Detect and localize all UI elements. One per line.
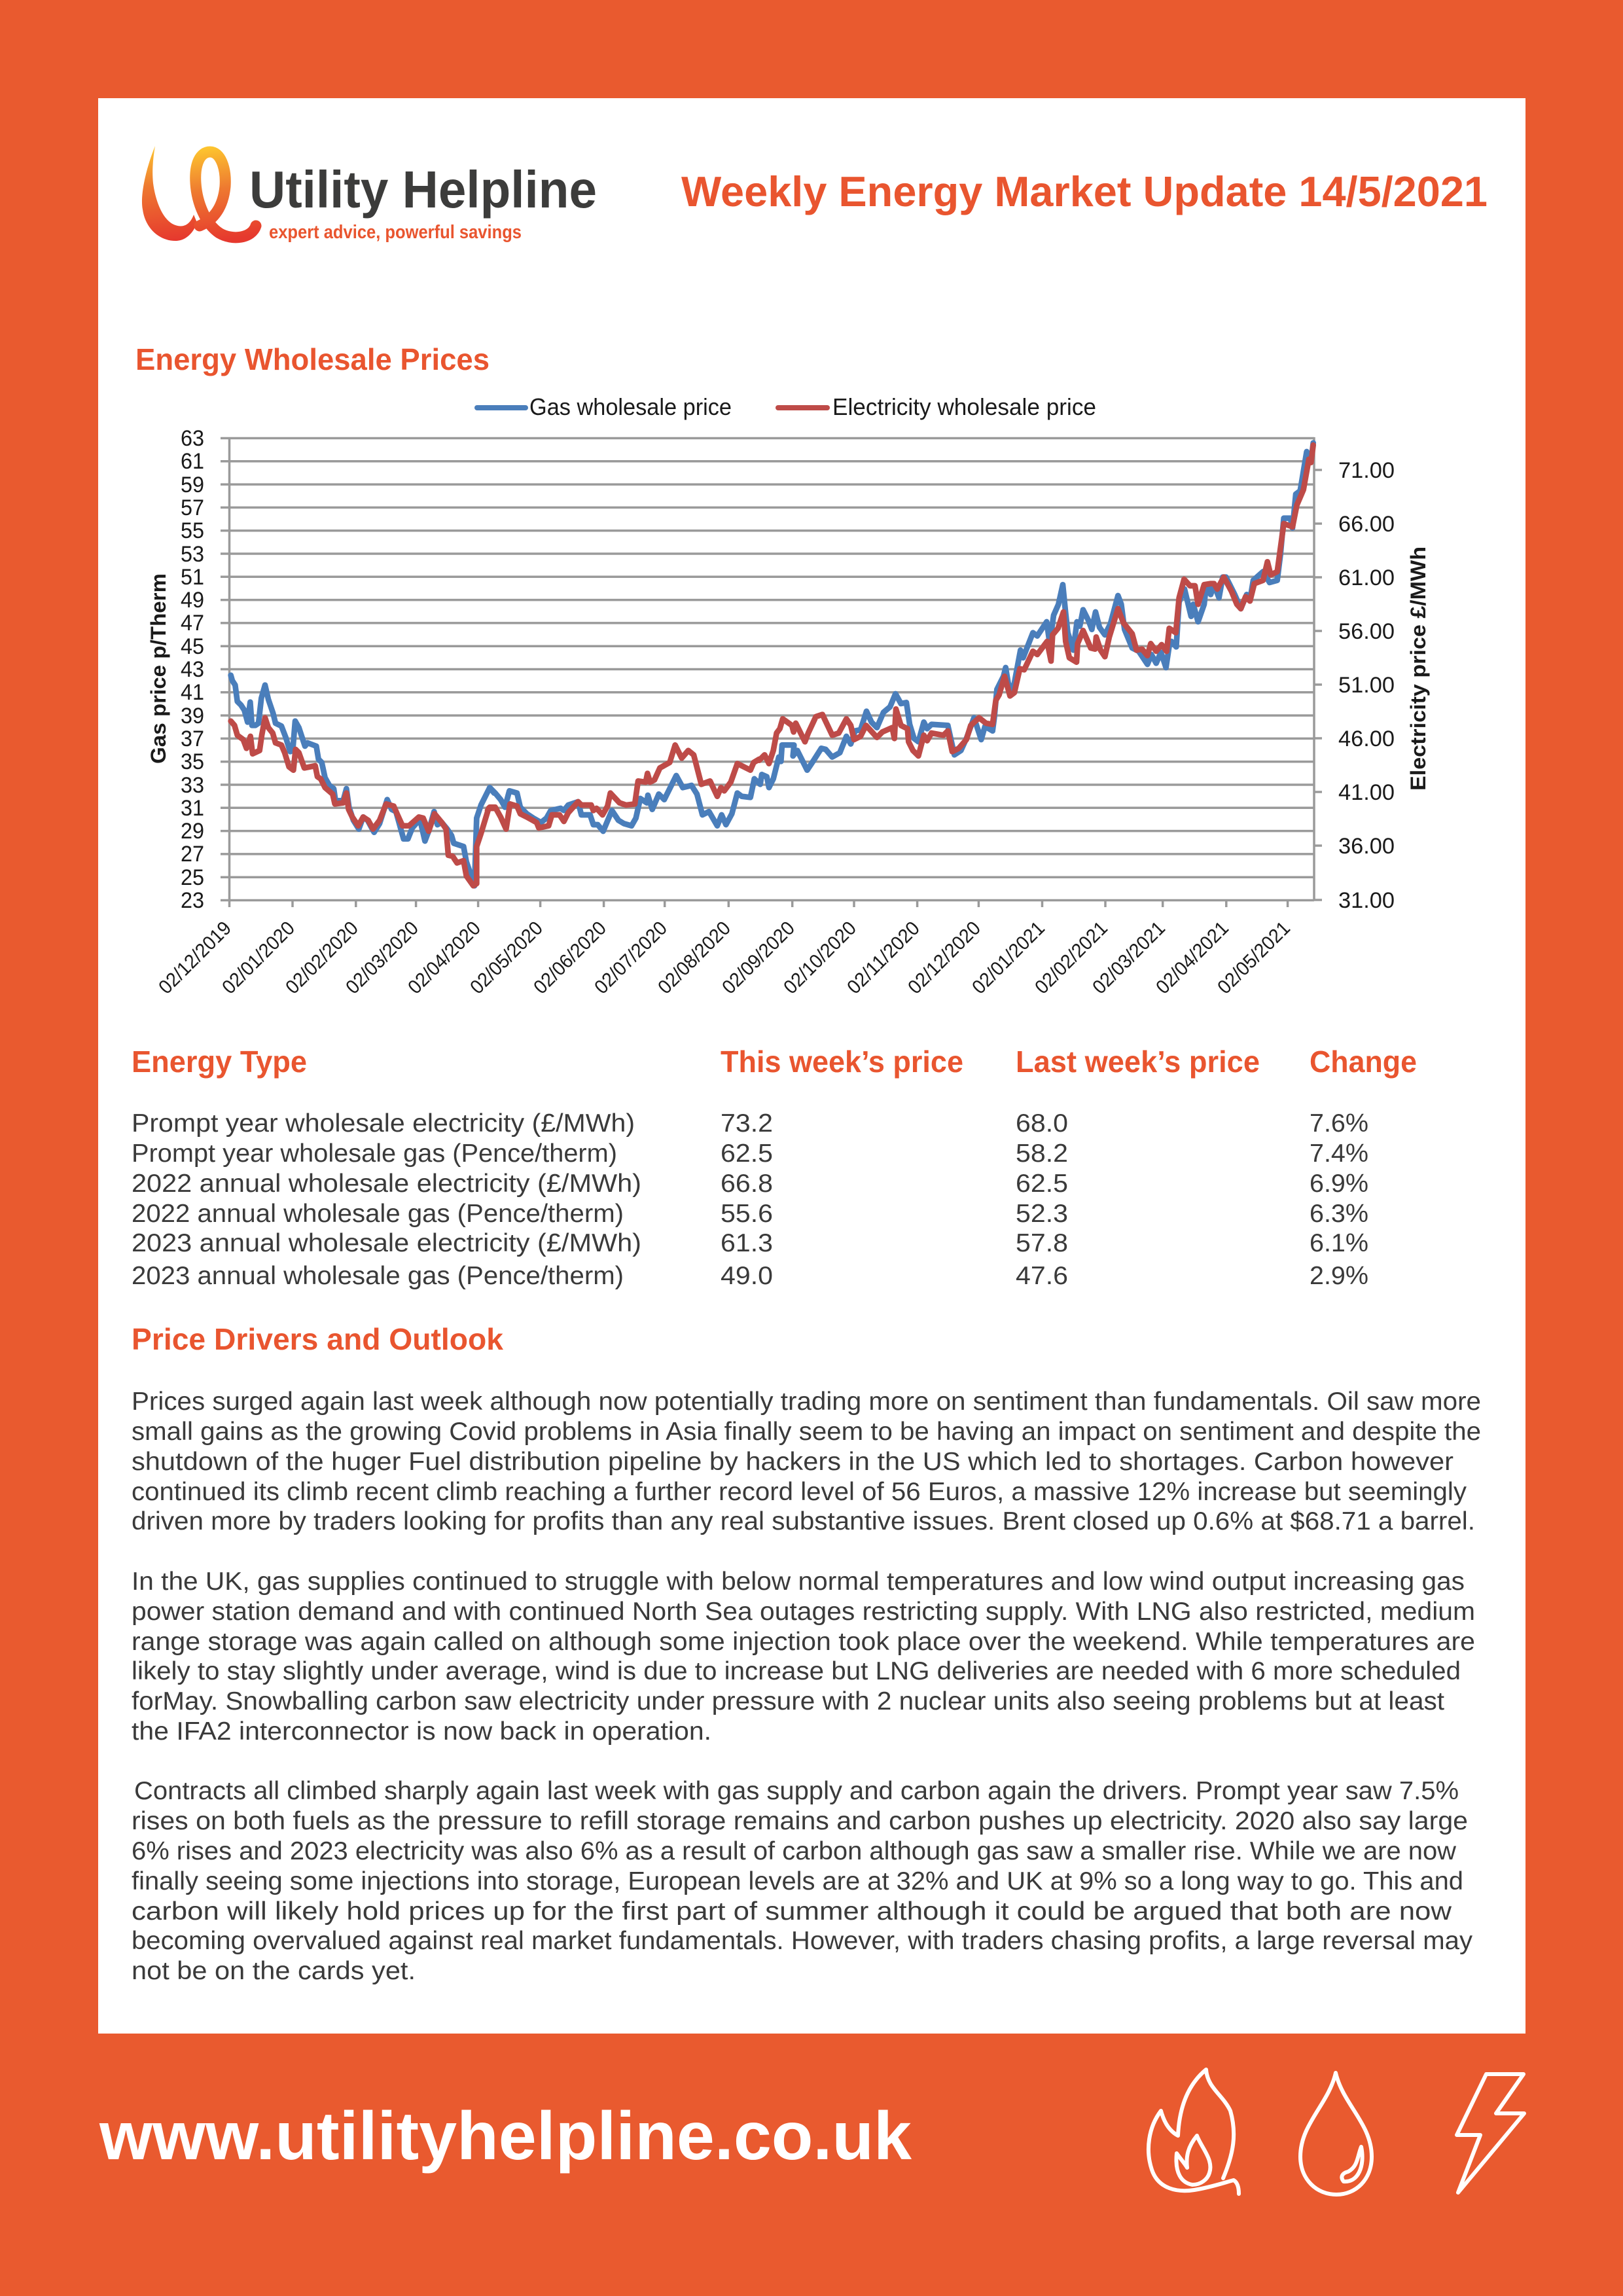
table row: 2023 gas: 2.9% xyxy=(1310,1262,1368,1290)
chart legend: Gas wholesale price xyxy=(529,393,732,420)
left axis labels: 43 xyxy=(181,657,204,682)
left axis labels: 27 xyxy=(181,842,204,867)
x axis date labels: 02/02/2021 xyxy=(1031,918,1112,998)
series: gas wholesale price xyxy=(231,443,1313,886)
table header row xyxy=(132,1045,1417,1079)
text block: paragraph 3: Contracts all climbed sharply again last week with gas supply and carbon again the drivers. Prompt year saw 7.5% xyxy=(134,1777,1459,1805)
table row: 2022 electricity: 62.5 xyxy=(1016,1170,1068,1198)
right axis labels: 71.00 xyxy=(1338,458,1395,483)
table row: 2022 electricity xyxy=(132,1170,1368,1198)
text block: paragraph 3: finally seeing some injections into storage, European levels are at 32% and UK at 9% so a long way to go. This and xyxy=(132,1867,1463,1895)
text block: paragraph 2: In the UK, gas supplies continued to struggle with below normal temperatures and low wind output increasing gas xyxy=(132,1568,1465,1596)
left axis labels: 31 xyxy=(181,796,204,821)
x axis date labels: 02/10/2020 xyxy=(779,918,861,998)
table header row: Change xyxy=(1310,1045,1417,1079)
left axis labels: 49 xyxy=(181,588,204,613)
left axis labels xyxy=(181,426,204,913)
x axis date labels: 02/06/2020 xyxy=(529,918,611,998)
right axis labels: 56.00 xyxy=(1338,619,1395,644)
text block: paragraph 2 xyxy=(132,1568,1475,1746)
right axis labels: 66.00 xyxy=(1338,512,1395,537)
table row: 2023 electricity: 2023 annual wholesale electricity (£/MWh) xyxy=(132,1229,641,1257)
right axis labels: 31.00 xyxy=(1338,888,1395,913)
text block: paragraph 1: Prices surged again last week although now potentially trading more on sentiment than fundamentals. Oil saw more xyxy=(132,1388,1481,1416)
text block: paragraph 2: forMay. Snowballing carbon saw electricity under pressure with 2 nuclear units also seeing problems but at least xyxy=(132,1687,1444,1715)
table row: 2022 gas: 55.6 xyxy=(721,1200,773,1228)
text block: paragraph 3: 6% rises and 2023 electricity was also 6% as a result of carbon although gas saw a smaller rise. While we are now xyxy=(132,1837,1457,1865)
table row: prompt year gas: 62.5 xyxy=(721,1139,773,1168)
left axis labels: 39 xyxy=(181,704,204,728)
table row: 2022 gas: 6.3% xyxy=(1310,1200,1368,1228)
text block: paragraph 3 xyxy=(132,1777,1473,1985)
table row: prompt year gas: Prompt year wholesale gas (Pence/therm) xyxy=(132,1139,617,1168)
table row: prompt year electricity: 7.6% xyxy=(1310,1109,1368,1138)
left axis labels: 57 xyxy=(181,495,204,520)
table row: 2022 electricity: 6.9% xyxy=(1310,1170,1368,1198)
panel: white content area xyxy=(98,98,1525,2034)
x axis date labels: 02/12/2019 xyxy=(154,918,236,998)
text block: paragraph 2: likely to stay slightly under average, wind is due to increase but LNG deliveries are needed with 6 more scheduled xyxy=(132,1657,1461,1685)
title: Weekly Energy Market Update 14/5/2021 xyxy=(681,168,1488,215)
text block: paragraph 3: carbon will likely hold prices up for the first part of summer although it could be argued that both are now xyxy=(132,1897,1452,1926)
chart legend: Electricity wholesale price xyxy=(832,393,1096,420)
x axis date labels: 02/12/2020 xyxy=(904,918,985,998)
right axis labels: 61.00 xyxy=(1338,565,1395,590)
x axis date labels: 02/05/2021 xyxy=(1213,918,1294,998)
heading: energy wholesale prices: Energy Wholesale Prices xyxy=(135,342,490,376)
table row: 2022 electricity: 66.8 xyxy=(721,1170,773,1198)
left axis title: Gas price p/Therm xyxy=(147,573,170,764)
x axis date labels: 02/03/2021 xyxy=(1088,918,1169,998)
right axis labels: 46.00 xyxy=(1338,726,1395,751)
x axis date labels: 02/05/2020 xyxy=(466,918,547,998)
x axis date labels xyxy=(154,918,1294,998)
logo tagline: expert advice, powerful savings xyxy=(269,222,522,243)
right axis labels xyxy=(1338,458,1395,913)
icon: water drop xyxy=(1300,2073,1372,2195)
table row: prompt year electricity: Prompt year wholesale electricity (£/MWh) xyxy=(132,1109,635,1138)
table row: prompt year gas xyxy=(132,1139,1368,1168)
left axis labels: 45 xyxy=(181,634,204,659)
table row: 2023 electricity: 61.3 xyxy=(721,1229,773,1257)
series: electricity wholesale price xyxy=(231,445,1313,886)
right axis labels: 41.00 xyxy=(1338,780,1395,805)
table row: 2022 gas: 2022 annual wholesale gas (Pence/therm) xyxy=(132,1200,624,1228)
left axis labels: 51 xyxy=(181,565,204,590)
table row: 2023 gas: 49.0 xyxy=(721,1262,773,1290)
table: energy prices xyxy=(132,1045,1417,1290)
left axis labels: 33 xyxy=(181,773,204,798)
text block: paragraph 3: not be on the cards yet. xyxy=(132,1957,416,1985)
left axis labels: 55 xyxy=(181,518,204,543)
table row: 2022 gas: 52.3 xyxy=(1016,1200,1068,1228)
left axis labels: 53 xyxy=(181,542,204,567)
table row: 2023 electricity: 6.1% xyxy=(1310,1229,1368,1257)
text block: paragraph 2: power station demand and with continued North Sea outages restricting supply. With LNG also restricted, medium xyxy=(132,1598,1475,1626)
text block: paragraph 1: small gains as the growing Covid problems in Asia finally seem to be having an impact on sentiment and despite the xyxy=(132,1418,1481,1446)
text block: paragraph 3: rises on both fuels as the pressure to refill storage remains and carbon pushes up electricity. 2020 also say large xyxy=(132,1807,1468,1835)
table header row: Last week’s price xyxy=(1016,1045,1260,1079)
x axis date labels: 02/08/2020 xyxy=(654,918,735,998)
left axis labels: 41 xyxy=(181,680,204,705)
icon: lightning bolt xyxy=(1457,2074,1524,2193)
heading: price drivers and outlook: Price Drivers and Outlook xyxy=(132,1322,503,1356)
text block: paragraph 2: range storage was again called on although some injection took place over the weekend. While temperatures are xyxy=(132,1628,1475,1656)
text block: paragraph 2: the IFA2 interconnector is now back in operation. xyxy=(132,1717,711,1746)
table row: 2023 electricity xyxy=(132,1229,1368,1257)
footer website url: www.utilityhelpline.co.uk xyxy=(99,2098,912,2174)
text block: paragraph 1: continued its climb recent climb reaching a further record level of 56 Euros, a massive 12% increase but seemingly xyxy=(132,1478,1467,1506)
table row: 2022 gas xyxy=(132,1200,1368,1228)
right axis labels: 36.00 xyxy=(1338,834,1395,859)
table row: prompt year electricity: 68.0 xyxy=(1016,1109,1068,1138)
left axis labels: 25 xyxy=(181,865,204,890)
left axis labels: 61 xyxy=(181,449,204,474)
x axis date labels: 02/11/2020 xyxy=(843,918,924,998)
table row: 2023 electricity: 57.8 xyxy=(1016,1229,1068,1257)
table row: prompt year electricity: 73.2 xyxy=(721,1109,773,1138)
table header row: This week’s price xyxy=(721,1045,963,1079)
line chart: gas and electricity wholesale prices xyxy=(147,393,1430,998)
x axis date labels: 02/02/2020 xyxy=(281,918,363,998)
x axis date labels: 02/01/2021 xyxy=(968,918,1049,998)
text block: paragraph 1 xyxy=(132,1388,1481,1535)
table header row: Energy Type xyxy=(132,1045,307,1079)
left axis labels: 35 xyxy=(181,749,204,774)
x axis date labels: 02/03/2020 xyxy=(342,918,423,998)
x axis date labels: 02/04/2021 xyxy=(1152,918,1233,998)
table row: 2023 gas: 2023 annual wholesale gas (Pence/therm) xyxy=(132,1262,624,1290)
table row: 2023 gas xyxy=(132,1262,1368,1290)
chart legend xyxy=(477,393,1096,420)
left axis labels: 23 xyxy=(181,888,204,913)
logo wordmark: Utility Helpline xyxy=(249,160,597,219)
left axis labels: 29 xyxy=(181,819,204,844)
table row: prompt year gas: 7.4% xyxy=(1310,1139,1368,1168)
x axis date labels: 02/09/2020 xyxy=(718,918,799,998)
left axis labels: 37 xyxy=(181,726,204,751)
icon: logo swirl xyxy=(142,146,256,241)
left axis labels: 59 xyxy=(181,473,204,497)
icon: flame xyxy=(1149,2070,1239,2194)
table row: 2023 gas: 47.6 xyxy=(1016,1262,1068,1290)
x axis date labels: 02/01/2020 xyxy=(218,918,299,998)
text block: paragraph 1: shutdown of the huger Fuel distribution pipeline by hackers in the US which led to shortages. Carbon however xyxy=(132,1448,1454,1476)
logo: Utility Helpline xyxy=(142,146,597,243)
x axis date labels: 02/04/2020 xyxy=(404,918,485,998)
x axis date labels: 02/07/2020 xyxy=(590,918,671,998)
table row: prompt year gas: 58.2 xyxy=(1016,1139,1068,1168)
text block: paragraph 3: becoming overvalued against real market fundamentals. However, with traders chasing profits, a large reversal may xyxy=(132,1927,1473,1955)
right axis title: Electricity price £/MWh xyxy=(1406,547,1430,791)
left axis labels: 47 xyxy=(181,611,204,636)
table row: prompt year electricity xyxy=(132,1109,1368,1138)
right axis labels: 51.00 xyxy=(1338,673,1395,698)
table row: 2022 electricity: 2022 annual wholesale electricity (£/MWh) xyxy=(132,1170,641,1198)
left axis labels: 63 xyxy=(181,426,204,451)
text block: paragraph 1: driven more by traders looking for profits than any real substantive issues. Brent closed up 0.6% at $68.71 a barrel. xyxy=(132,1507,1475,1535)
